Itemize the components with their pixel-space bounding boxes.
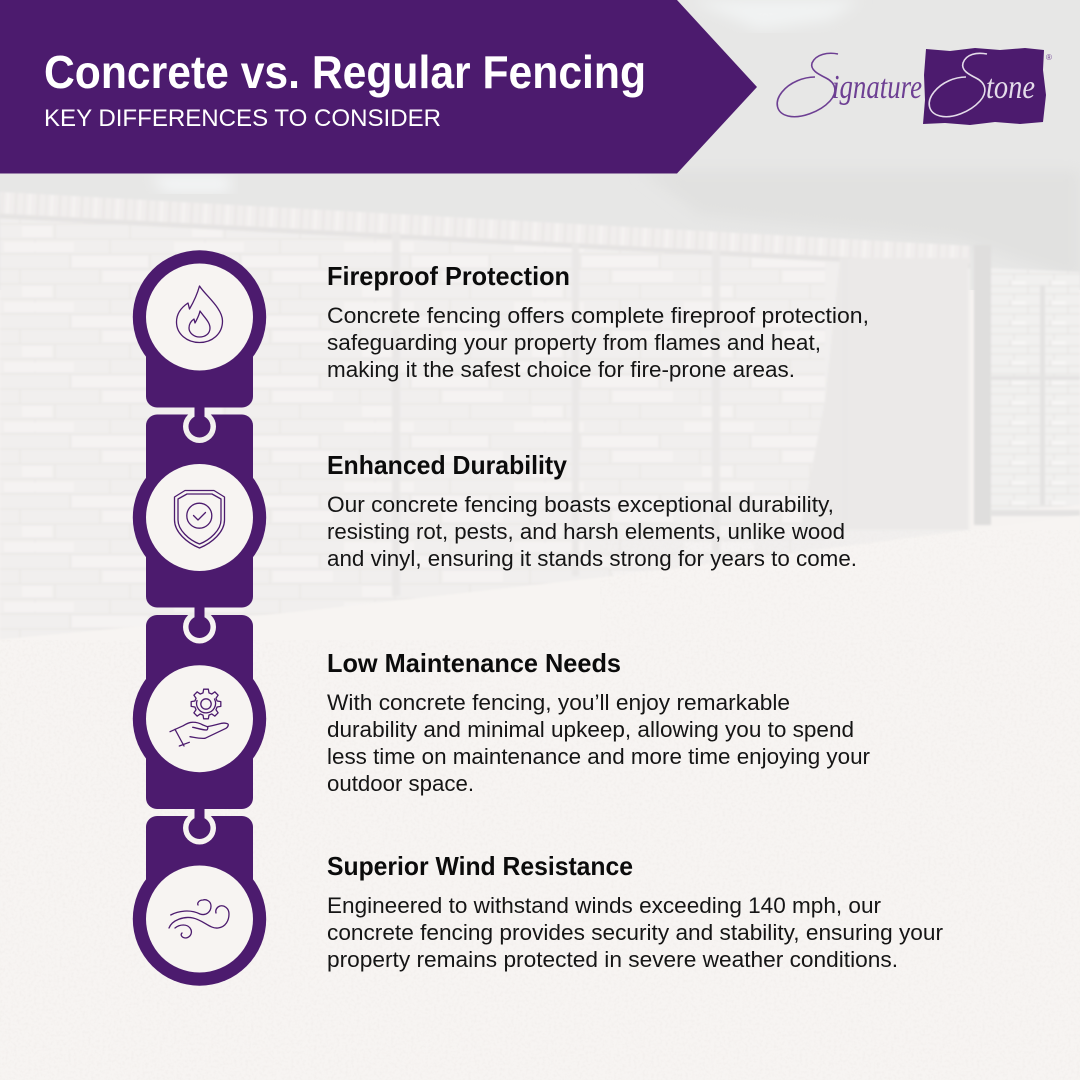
icon circle 2 [146, 464, 253, 571]
section: Low Maintenance Needs [327, 648, 870, 796]
body text: Our concrete fencing boasts exceptional durability, [327, 492, 834, 517]
body text: resisting rot, pests, and harsh elements, unlike wood [327, 519, 845, 544]
body text [327, 893, 944, 972]
body text [327, 303, 869, 382]
body text: less time on maintenance and more time enjoying your [327, 744, 870, 769]
body text: making it the safest choice for fire-prone areas. [327, 357, 795, 382]
connector knob 2 [188, 605, 210, 638]
background: faded photo of concrete fence [0, 0, 1080, 599]
icon circle 4 [146, 866, 253, 972]
icon: shield with check [174, 490, 224, 548]
body text: durability and minimal upkeep, allowing you to spend [327, 717, 854, 742]
body text [327, 690, 870, 796]
puzzle piece 4 [133, 816, 266, 986]
puzzle piece 3 [133, 615, 266, 839]
icon: hand holding gear [170, 689, 228, 746]
puzzle timeline [133, 250, 266, 986]
icon circle 3 [146, 665, 253, 772]
logo word: Stone: tone [986, 69, 1035, 106]
icon: flame [176, 286, 222, 342]
background: trees and sky [0, 0, 1080, 290]
logo word: Signature: ignature [832, 69, 922, 106]
body text: and vinyl, ensuring it stands strong for years to come. [327, 546, 857, 571]
body text: Concrete fencing offers complete fireproof protection, [327, 303, 869, 328]
icon circle 1 [146, 264, 253, 370]
puzzle piece 1 [133, 250, 266, 438]
section: Superior Wind Resistance [327, 851, 944, 972]
body text: outdoor space. [327, 771, 474, 796]
heading: Enhanced Durability [327, 450, 568, 480]
body text: property remains protected in severe weather conditions. [327, 947, 898, 972]
banner arrow shape [0, 0, 757, 174]
body text: safeguarding your property from flames and heat, [327, 330, 821, 355]
logo: Signature Stone [777, 48, 1052, 125]
background: gravel ground [0, 516, 1080, 1080]
header banner [0, 0, 757, 174]
icon: wind [169, 900, 229, 938]
background: gate and right wall [974, 245, 1080, 525]
body text: concrete fencing provides security and stability, ensuring your [327, 920, 944, 945]
registered mark: ® [1046, 53, 1052, 62]
puzzle piece 2 [133, 414, 266, 638]
connector knob 1 [188, 405, 210, 438]
section: Enhanced Durability [327, 450, 857, 571]
background: concrete wall [0, 192, 970, 640]
section: Fireproof Protection [327, 261, 869, 382]
heading: Superior Wind Resistance [327, 851, 633, 881]
body text [327, 492, 857, 571]
heading: Low Maintenance Needs [327, 648, 621, 678]
subtitle: KEY DIFFERENCES TO CONSIDER [44, 105, 441, 132]
connector knob 3 [188, 807, 210, 839]
heading: Fireproof Protection [327, 261, 570, 291]
logo swash: Stone [929, 53, 987, 117]
logo swash: Signature [777, 53, 838, 117]
body text: With concrete fencing, you’ll enjoy remarkable [327, 690, 790, 715]
body text: Engineered to withstand winds exceeding 140 mph, our [327, 893, 882, 918]
title: Concrete vs. Regular Fencing [44, 46, 646, 98]
logo box [923, 48, 1046, 125]
